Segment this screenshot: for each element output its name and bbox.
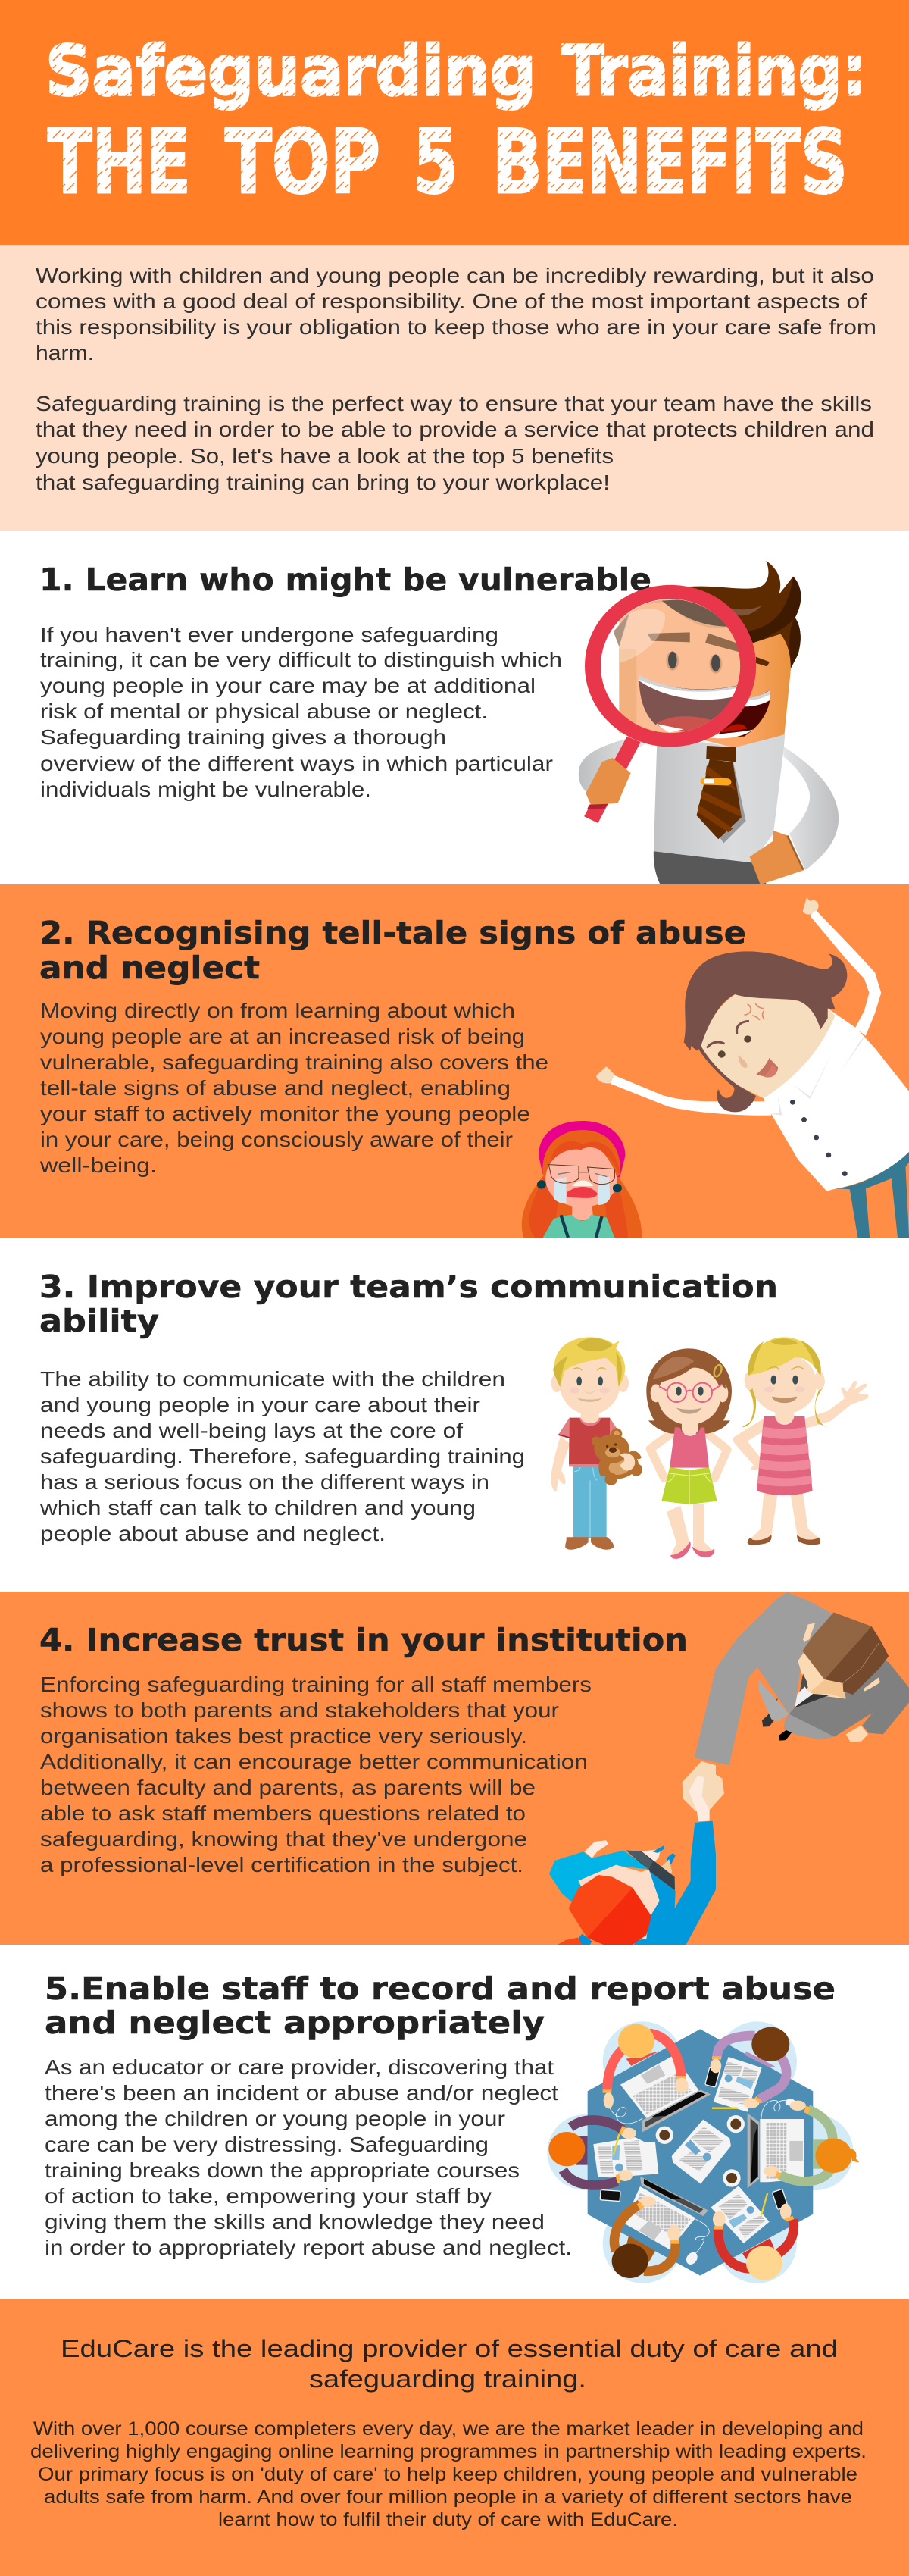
intro paragraph 2 [36,392,874,494]
text: benefit 3: safeguarding. Therefore, safeguarding training [40,1445,525,1468]
text: benefit 3: people about abuse and neglect. [40,1522,386,1545]
panel: benefit 4 [0,1592,909,1945]
footer heading: EduCare is the leading provider of essential duty of care and [61,2335,838,2362]
panel: introduction [0,245,909,531]
crying girl [522,1121,642,1238]
text: benefit 4: able to ask staff members questions related to [40,1801,526,1825]
text: benefit 4: Additionally, it can encourage better communication [40,1750,588,1773]
panel: benefit 3 [0,1238,909,1592]
person right [764,2101,859,2181]
heading: benefit 5: 5.Enable staff to record and report abuse [45,1970,836,2007]
illustration: angry adult and crying girl [522,897,909,1238]
footer heading [61,2335,838,2393]
woman in blue [549,1821,716,1945]
girl with glasses [646,1348,732,1559]
text: benefit 2: tell-tale signs of abuse and neglect, enabling [40,1076,511,1100]
title: THE [48,111,191,214]
text: benefit 3: has a serious focus on the different ways in [40,1470,489,1494]
text: benefit 4: between faculty and parents, as parents will be [40,1776,536,1799]
intro paragraph 2: Safeguarding training is the perfect way to ensure that your team have the skills [36,392,872,415]
text: benefit 3: The ability to communicate with the children [40,1367,505,1391]
text: benefit 2: Moving directly on from learning about which [40,999,515,1022]
text: benefit 4: shows to both parents and stakeholders that your [40,1698,559,1722]
text: benefit 1: overview of the different ways in which particular [40,752,553,775]
text: benefit 3: which staff can talk to children and young [39,1496,476,1520]
footer text: delivering highly engaging online learning programmes in partnership with leading experts. [30,2441,867,2462]
text: benefit 5: care can be very distressing. Safeguarding [45,2133,489,2156]
text: benefit 2 [39,999,548,1177]
illustration: handshake from above [549,1592,909,1945]
text: benefit 1: risk of mental or physical abuse or neglect. [40,700,488,723]
text: benefit 3 [39,1367,525,1545]
intro paragraph 2: that safeguarding training can bring to your workplace! [36,471,610,494]
text: benefit 2: well-being. [39,1153,157,1177]
intro paragraph 1: comes with a good deal of responsibility. One of the most important aspects of [36,290,867,313]
title: 5 [413,111,458,214]
heading: benefit 3 [39,1269,778,1339]
intro paragraph 1: this responsibility is your obligation to keep those who are in your care safe from [36,315,876,339]
person top-left [603,2024,689,2108]
title [45,32,867,214]
footer text: learnt how to fulfil their duty of care with EduCare. [218,2509,678,2531]
text: benefit 4 [40,1673,592,1876]
person left [548,2120,636,2185]
text: benefit 5: training breaks down the appropriate courses [45,2158,520,2182]
text: benefit 1: young people in your care may be at additional [40,674,536,697]
footer text: With over 1,000 course completers every day, we are the market leader in developing and [33,2418,864,2440]
text: benefit 1: If you haven't ever undergone safeguarding [40,623,498,646]
text: benefit 5: there's been an incident or abuse and/or neglect [45,2081,558,2105]
hands [683,1761,724,1821]
illustration: three children [551,1337,868,1559]
adult [596,897,909,1238]
text: benefit 1: Safeguarding training gives a thorough [40,725,446,749]
footer text [30,2418,867,2531]
heading: benefit 2 [39,915,746,986]
intro paragraph 2: young people. So, let's have a look at the top 5 benefits [36,444,614,468]
text: benefit 3: needs and well-being lays at the core of [40,1419,463,1442]
intro paragraph 1: Working with children and young people can be incredibly rewarding, but it also [36,264,874,287]
panel: header [0,0,909,245]
intro paragraph 1 [36,264,876,365]
text: benefit 4: Enforcing safeguarding training for all staff members [40,1673,592,1696]
heading: benefit 4: 4. Increase trust in your institution [39,1622,688,1658]
text: benefit 1: training, it can be very difficult to distinguish which [40,648,562,671]
heading: benefit 1: 1. Learn who might be vulnerable [39,562,651,598]
person bottom-right [713,2204,794,2280]
text: benefit 2: vulnerable, safeguarding training also covers the [40,1050,548,1074]
heading: benefit 2: 2. Recognising tell-tale signs of abuse [39,915,746,951]
man in grey suit [695,1592,909,1765]
girl with braids waving [733,1337,868,1545]
intro paragraph 1: harm. [36,341,94,365]
intro paragraph 2: that they need in order to be able to provide a service that protects children and [36,418,874,441]
heading: benefit 5: and neglect appropriately [45,2005,545,2041]
heading: benefit 5 [45,1970,836,2041]
text: benefit 5 [45,2055,572,2259]
title: Safeguarding [45,32,536,111]
text: benefit 5: As an educator or care provider, discovering that [45,2055,554,2079]
heading: benefit 2: and neglect [39,950,260,986]
laptop right [748,2113,804,2188]
coffee cups [656,2115,745,2187]
heading: benefit 3: ability [39,1303,159,1339]
phones, pencils and mice [600,2067,795,2267]
text: benefit 5: giving them the skills and knowledge they need [45,2210,545,2233]
person bottom-left [612,2196,681,2278]
title: Training: [562,32,867,111]
text: benefit 1: individuals might be vulnerable. [40,778,371,801]
text: benefit 2: in your care, being consciously aware of their [40,1128,513,1151]
panel: footer [0,2299,909,2576]
heading: benefit 3: 3. Improve your team’s communication [39,1269,778,1305]
footer text: adults safe from harm. And over four million people in a variety of different sectors have [44,2487,852,2508]
title: TOP [225,111,380,214]
text: benefit 4: a professional-level certification in the subject. [40,1853,523,1876]
text: benefit 2: your staff to actively monitor the young people [40,1102,530,1125]
documents [593,2057,770,2243]
footer heading: safeguarding training. [309,2365,586,2393]
illustration: man behind magnifying glass [579,561,839,884]
panel: benefit 1 [40,561,839,884]
text: benefit 3: and young people in your care about their [40,1393,480,1416]
panel: benefit 2 [0,884,909,1238]
text: benefit 4: safeguarding, knowing that they've undergone [40,1827,527,1851]
magnified lens view [614,599,741,733]
illustration: team meeting around hexagonal table [547,2021,859,2283]
person top-right [711,2027,789,2108]
text: benefit 5: in order to appropriately report abuse and neglect. [45,2236,572,2259]
boy with teddy [551,1337,642,1550]
text: benefit 5: among the children or young people in your [45,2107,505,2130]
text: benefit 1 [40,623,562,801]
laptop bottom-left [623,2177,708,2249]
text: benefit 2: young people are at an increased risk of being [40,1025,525,1048]
panel: benefit 5 [0,1945,909,2299]
laptop top-left [620,2055,711,2132]
footer text: Our primary focus is on 'duty of care' to help keep children, young people and vulnerable [38,2464,857,2485]
text: benefit 5: of action to take, empowering your staff by [45,2184,492,2208]
text: benefit 4: organisation takes best practice very seriously. [40,1724,527,1748]
